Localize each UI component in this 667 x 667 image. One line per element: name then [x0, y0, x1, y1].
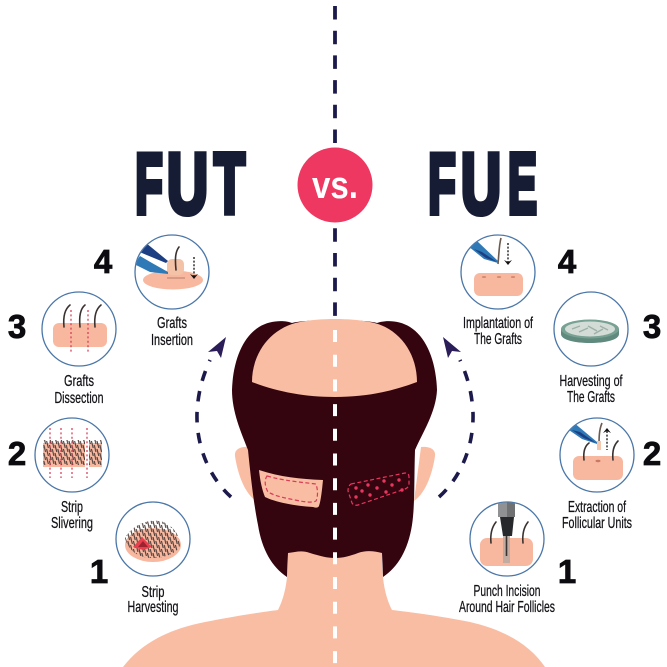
icon: implantation of grafts	[461, 235, 535, 309]
step: FUE 4 implantation	[461, 235, 577, 348]
bald crown	[252, 319, 417, 397]
arrow: FUT progression	[197, 337, 231, 497]
number 2: 2	[643, 435, 661, 472]
label: Harvesting	[128, 599, 178, 616]
label: Punch Incision	[474, 583, 540, 600]
label: Dissection	[54, 390, 104, 407]
title: FUE: E	[508, 137, 537, 232]
title: FUT: U	[167, 137, 208, 232]
icon: punch incision tool	[470, 500, 544, 576]
step: FUT 3 grafts dissection	[8, 292, 116, 407]
label: Insertion	[151, 332, 193, 349]
title: FUT: T	[214, 137, 245, 232]
title: FUE: F	[428, 137, 456, 232]
label: The Grafts	[474, 331, 522, 348]
head illustration	[123, 319, 545, 667]
label: Strip	[61, 499, 83, 516]
step: FUT 4 grafts insertion	[94, 235, 209, 349]
icon: grafts dissection	[42, 292, 116, 366]
label: Harvesting of	[560, 373, 623, 390]
label: Strip	[142, 584, 165, 601]
label: Grafts	[64, 373, 94, 390]
step: FUE 3 harvesting	[554, 292, 661, 406]
number 3: 3	[643, 308, 661, 345]
label: Grafts	[157, 315, 187, 332]
vs badge	[298, 148, 372, 222]
center divider dashed line	[333, 6, 337, 316]
label: The Grafts	[567, 389, 615, 406]
title: FUE: U	[461, 137, 501, 232]
step: FUT 1 strip harvesting	[90, 502, 190, 616]
number 1: 1	[558, 553, 576, 590]
title: FUT	[135, 137, 245, 232]
label: Extraction of	[568, 499, 626, 516]
label: Implantation of	[463, 315, 533, 332]
step: FUT 2 strip slivering	[8, 418, 109, 532]
icon: strip slivering	[35, 418, 109, 492]
step: FUE 1 punch incision	[459, 500, 576, 616]
white center dashes	[333, 330, 337, 667]
donor strip: FUT	[259, 470, 323, 508]
shoulders and neck	[123, 540, 545, 667]
icon: grafts insertion	[134, 235, 209, 309]
label: Slivering	[51, 515, 93, 532]
donor area: FUE	[348, 473, 409, 505]
right ear	[414, 447, 435, 501]
number 4: 4	[94, 243, 113, 280]
number 2: 2	[8, 435, 26, 472]
label: Around Hair Follicles	[459, 599, 555, 616]
title: FUT: F	[135, 137, 163, 232]
arrow: FUE progression	[439, 337, 473, 497]
hair	[232, 320, 437, 577]
icon: petri dish	[554, 292, 628, 366]
vs badge: vs.	[312, 165, 358, 207]
label: Follicular Units	[562, 515, 632, 532]
title: FUE	[428, 137, 537, 232]
number 1: 1	[90, 553, 108, 590]
number 4: 4	[558, 243, 577, 280]
step: FUE 2 extraction	[560, 418, 661, 532]
icon: strip harvesting	[116, 502, 190, 576]
left ear	[235, 447, 256, 501]
number 3: 3	[8, 308, 26, 345]
icon: extraction of follicular units	[560, 418, 634, 492]
